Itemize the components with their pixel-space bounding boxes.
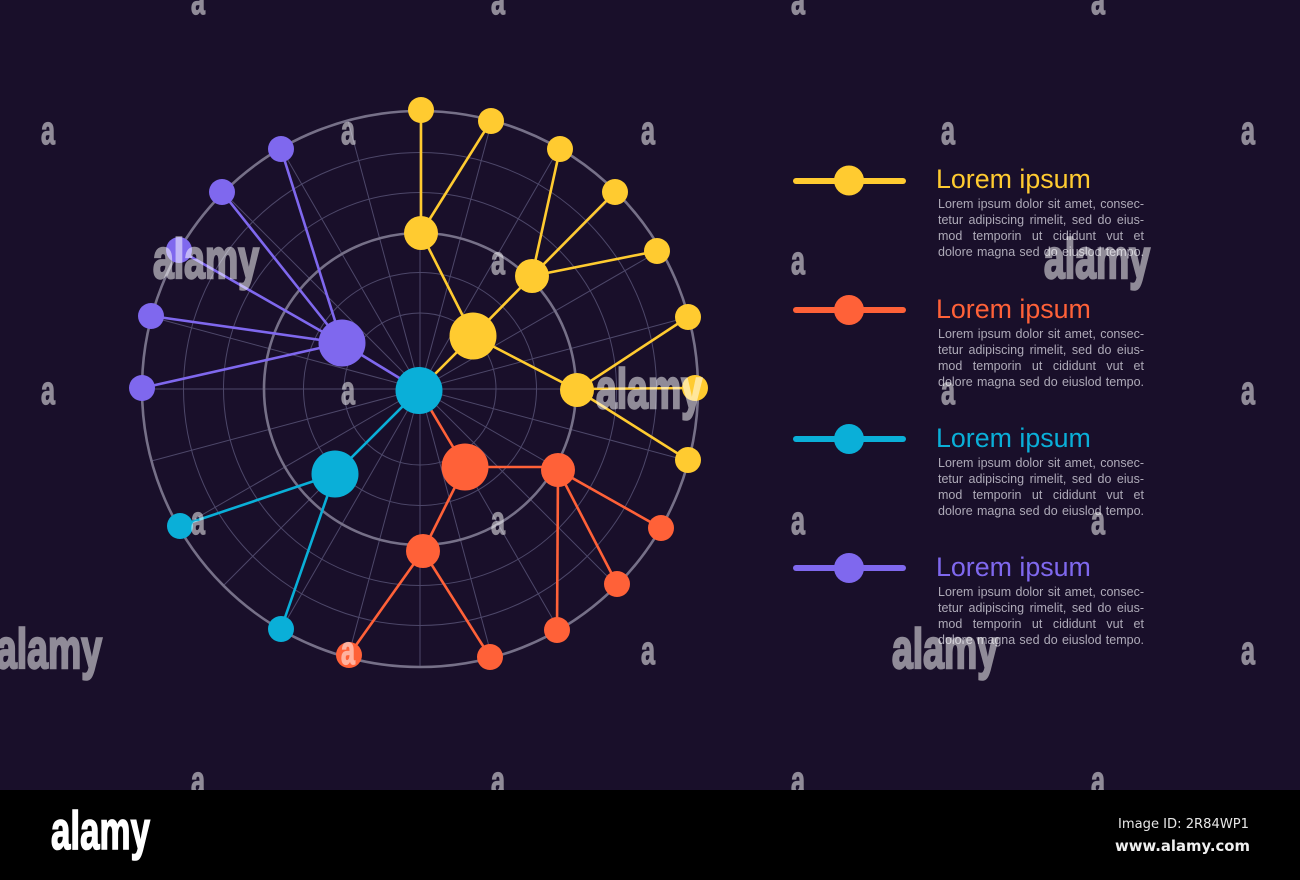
center node <box>396 367 442 414</box>
footer image id: Image ID: 2R84WP1 <box>1118 816 1249 832</box>
watermarks: alamy <box>892 617 998 680</box>
purple nodes <box>129 136 366 401</box>
description: Lorem ipsum dolor sit amet, consec- <box>938 197 1144 211</box>
description: tetur adipiscing rimelit, sed do eius- <box>938 342 1144 356</box>
description: tetur adipiscing rimelit, sed do eius- <box>938 601 1144 615</box>
watermarks: a <box>641 109 655 153</box>
orange nodes <box>336 444 674 670</box>
heading: Lorem ipsum <box>936 164 1091 194</box>
cyan nodes <box>167 450 358 642</box>
yellow nodes <box>404 97 708 473</box>
heading: Lorem ipsum <box>936 552 1091 582</box>
description <box>938 585 1144 647</box>
footer logo: alamy <box>51 801 150 861</box>
description: mod temporin ut cididunt vut et <box>938 229 1144 243</box>
description: Lorem ipsum dolor sit amet, consec- <box>938 456 1144 470</box>
radial network chart <box>129 97 708 670</box>
yellow links <box>419 110 695 460</box>
watermarks: a <box>941 369 955 413</box>
watermarks: a <box>1241 369 1255 413</box>
watermarks: a <box>791 239 805 283</box>
watermarks: a <box>41 369 55 413</box>
watermarks: alamy <box>153 227 259 290</box>
description: dolore magna sed do eiuslod tempo. <box>938 504 1144 518</box>
polar grid <box>142 111 698 667</box>
description <box>938 326 1144 388</box>
watermarks: a <box>41 109 55 153</box>
watermarks: a <box>491 239 505 283</box>
footer bar <box>0 790 1300 880</box>
legend item: yellow <box>936 164 1144 259</box>
heading: Lorem ipsum <box>936 423 1091 453</box>
yellow branch <box>404 97 708 473</box>
watermarks: alamy <box>596 357 702 420</box>
watermarks: a <box>341 369 355 413</box>
cyan links <box>180 390 419 629</box>
watermarks: a <box>341 109 355 153</box>
watermarks: a <box>191 499 205 543</box>
description: Lorem ipsum dolor sit amet, consec- <box>938 326 1144 340</box>
watermarks: alamy <box>1044 227 1150 290</box>
legend item: purple <box>936 552 1144 647</box>
description: mod temporin ut cididunt vut et <box>938 488 1144 502</box>
legend item: orange <box>936 294 1144 388</box>
watermarks: a <box>491 499 505 543</box>
watermarks: a <box>1091 499 1105 543</box>
watermarks: a <box>1241 109 1255 153</box>
description: dolore magna sed do eiuslod tempo. <box>938 245 1144 259</box>
description <box>938 456 1144 518</box>
marker: purple <box>793 553 906 583</box>
watermarks: a <box>641 629 655 673</box>
marker: cyan <box>793 424 906 454</box>
description: tetur adipiscing rimelit, sed do eius- <box>938 472 1144 486</box>
legend markers <box>793 166 906 583</box>
heading: Lorem ipsum <box>936 294 1091 324</box>
marker: orange <box>793 295 906 325</box>
description: dolore magna sed do eiuslod tempo. <box>938 374 1144 388</box>
watermarks: a <box>791 499 805 543</box>
description: mod temporin ut cididunt vut et <box>938 617 1144 631</box>
watermarks: a <box>341 629 355 673</box>
orange branch <box>336 390 674 670</box>
purple links <box>142 149 419 390</box>
watermarks: a <box>1241 629 1255 673</box>
purple branch <box>129 136 419 401</box>
legend item: cyan <box>936 423 1144 518</box>
orange links <box>349 390 661 657</box>
description: Lorem ipsum dolor sit amet, consec- <box>938 585 1144 599</box>
description: tetur adipiscing rimelit, sed do eius- <box>938 213 1144 227</box>
cyan branch <box>167 390 419 642</box>
description: dolore magna sed do eiuslod tempo. <box>938 633 1144 647</box>
description: mod temporin ut cididunt vut et <box>938 358 1144 372</box>
footer url: www.alamy.com <box>1115 837 1250 855</box>
description <box>938 197 1144 259</box>
marker: yellow <box>793 166 906 196</box>
watermarks: a <box>941 109 955 153</box>
watermarks: alamy <box>0 617 102 680</box>
